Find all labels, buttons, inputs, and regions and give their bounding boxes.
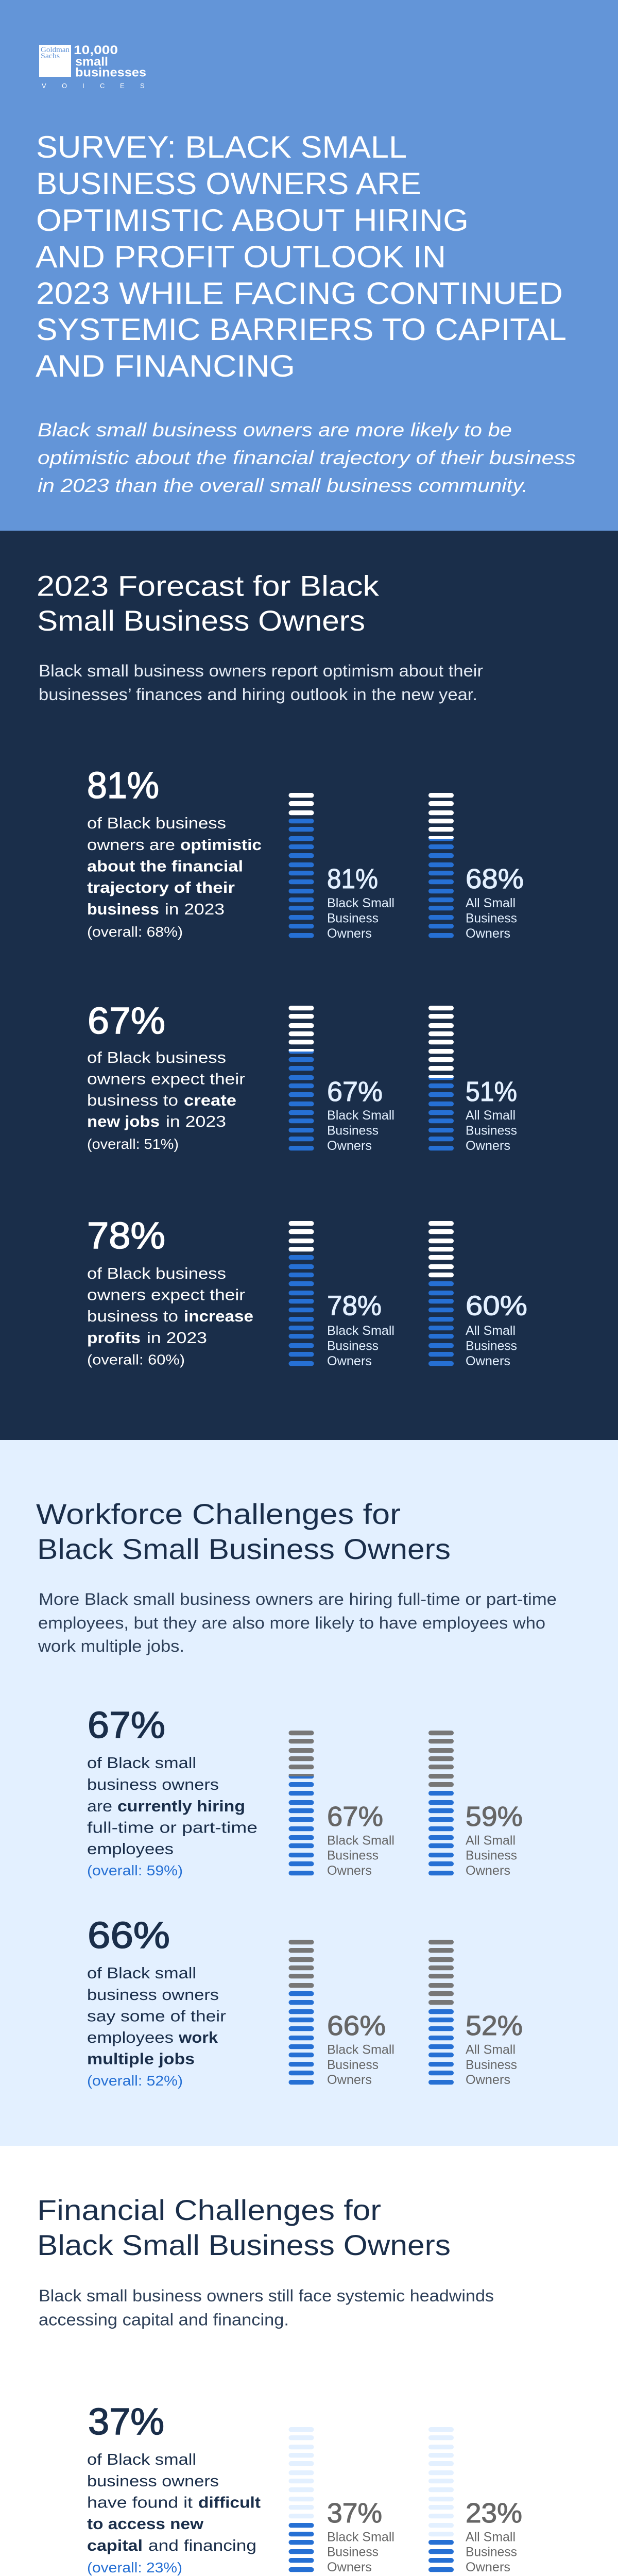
heading: workforce challenges: Black Small Business Owners: [37, 1533, 451, 1565]
stat: 67% currently hiring: are: [87, 1797, 112, 1815]
stat: 78% expect to increase profits: owners expect their: [87, 1286, 245, 1303]
heading: workforce challenges: Workforce Challenges for: [36, 1498, 401, 1530]
stat: 81% optimistic about financial trajectory: trajectory of their: [87, 878, 235, 896]
label: 51% all small business owners: All Small: [466, 1108, 516, 1123]
stat: 81% optimistic about financial trajectory: of Black business: [87, 814, 226, 832]
stat: 37% difficult to access new capital: [87, 2401, 261, 2575]
stat: 67% currently hiring: of Black small: [87, 1754, 196, 1772]
chart: 51% all small business owners: [428, 1006, 454, 1150]
label: 67% black small business owners: [327, 1076, 394, 1153]
stat: 67% expect to create new jobs: new jobs: [87, 1112, 160, 1130]
subtitle: in 2023 than the overall small business community.: [38, 475, 528, 496]
stat: 81% optimistic about financial trajectory: [87, 765, 262, 940]
stat: 66% employees work multiple jobs: multiple jobs: [87, 2049, 195, 2068]
title: SYSTEMIC BARRIERS TO CAPITAL: [36, 312, 566, 347]
label: 66% black small business owners: Owners: [327, 2073, 372, 2087]
label: 60% all small business owners: [466, 1290, 527, 1368]
stat: 67% currently hiring: currently hiring: [117, 1797, 245, 1815]
heading: 2023 forecast: [37, 570, 380, 637]
logo: Goldman Sachs 10,000 Small Businesses Voices: Goldman: [41, 46, 70, 54]
stat: 37% difficult to access new capital: to access new: [87, 2515, 204, 2533]
logo: Goldman Sachs 10,000 Small Businesses Voices: VOICES: [42, 82, 145, 90]
subtitle: [38, 419, 576, 496]
label: 67% black small business owners: Owners: [327, 1139, 372, 1153]
label: 37% black small business owners: Black Small: [327, 2530, 394, 2544]
label: 59% all small business owners: 59%: [466, 1801, 523, 1832]
label: 67% black small business owners: Black Small: [327, 1108, 394, 1123]
label: 68% all small business owners: All Small: [466, 896, 516, 910]
chart: 59% all small business owners: [428, 1731, 454, 1875]
stat: 67% currently hiring: (overall: 59%): [87, 1862, 183, 1878]
label: 60% all small business owners: 60%: [466, 1290, 527, 1321]
stat: 67% currently hiring: employees: [87, 1840, 174, 1858]
label: 52% all small business owners: [466, 2010, 523, 2087]
title: 2023 WHILE FACING CONTINUED: [36, 276, 563, 311]
label: 67% black small business owners: Black Small: [327, 1833, 394, 1848]
label: 23% all small business owners: 23%: [466, 2498, 522, 2529]
chart: 37% black small business owners: [288, 2427, 314, 2572]
label: 37% black small business owners: [327, 2498, 394, 2574]
label: 60% all small business owners: Business: [466, 1338, 517, 1353]
label: 67% black small business owners: Owners: [327, 1863, 372, 1878]
title: AND FINANCING: [36, 349, 295, 383]
heading: financial challenges: Black Small Business Owners: [37, 2229, 451, 2261]
panel: workforce challenges: [0, 1440, 618, 2146]
text block: workforce intro: work multiple jobs.: [38, 1637, 184, 1655]
text block: financial intro: Black small business owners still face systemic headwinds: [39, 2286, 494, 2305]
stat: 67% currently hiring: business owners: [87, 1775, 219, 1793]
stat: 37% difficult to access new capital: (overall: 23%): [87, 2560, 182, 2575]
label: 67% black small business owners: 67%: [327, 1076, 383, 1107]
label: 78% black small business owners: 78%: [327, 1290, 382, 1321]
logo: Goldman Sachs 10,000 Small Businesses Voices: small: [75, 55, 108, 69]
chart: 66% black small business owners: [288, 1940, 314, 2084]
label: 67% black small business owners: [327, 1801, 394, 1878]
text block: financial intro: [39, 2286, 494, 2329]
heading: financial challenges: [37, 2194, 451, 2261]
stat: 81% optimistic about financial trajectory: owners are: [87, 836, 175, 854]
stat: 81% optimistic about financial trajectory: business: [87, 900, 159, 918]
title: [36, 130, 566, 383]
title: BUSINESS OWNERS ARE: [36, 166, 421, 201]
chart: 67% black small business owners: [288, 1006, 314, 1150]
stat: 66% employees work multiple jobs: [87, 1915, 226, 2089]
stat: 81% optimistic about financial trajectory: about the financial: [87, 857, 243, 875]
text block: workforce intro: [38, 1590, 557, 1655]
label: 37% black small business owners: Owners: [327, 2560, 372, 2574]
label: 23% all small business owners: [466, 2498, 522, 2574]
label: 51% all small business owners: 51%: [466, 1076, 517, 1107]
stat: 66% employees work multiple jobs: of Black small: [87, 1964, 196, 1982]
label: 52% all small business owners: 52%: [466, 2010, 523, 2041]
stat: 67% currently hiring: [87, 1705, 258, 1878]
chart: 67% black small business owners: [288, 1731, 314, 1875]
label: 81% black small business owners: 81%: [327, 863, 378, 894]
label: 59% all small business owners: [466, 1801, 523, 1878]
logo: Goldman Sachs 10,000 Small Businesses Voices: Sachs: [41, 52, 60, 60]
stat: 67% expect to create new jobs: 67%: [88, 1001, 165, 1042]
label: 66% black small business owners: Black Small: [327, 2042, 394, 2057]
label: 81% black small business owners: Owners: [327, 926, 372, 941]
label: 51% all small business owners: Owners: [466, 1139, 510, 1153]
label: 68% all small business owners: [466, 863, 524, 941]
label: 59% all small business owners: All Small: [466, 1833, 516, 1848]
label: 23% all small business owners: Owners: [466, 2560, 510, 2574]
stat: 78% expect to increase profits: business to: [87, 1307, 178, 1325]
stat: 67% expect to create new jobs: [87, 1001, 245, 1152]
stat: 78% expect to increase profits: (overall: 60%): [87, 1352, 185, 1367]
label: 52% all small business owners: Business: [466, 2058, 517, 2072]
text block: forecast intro: [39, 662, 483, 704]
stat: 78% expect to increase profits: 78%: [87, 1215, 165, 1257]
stat: 67% expect to create new jobs: of Black business: [87, 1048, 226, 1066]
label: 81% black small business owners: Business: [327, 911, 379, 925]
chart: 23% all small business owners: [428, 2427, 454, 2572]
stat: 81% optimistic about financial trajectory: 81%: [87, 765, 159, 806]
panel: 2023 forecast: [0, 531, 618, 1440]
stat: 67% expect to create new jobs: in 2023: [166, 1112, 226, 1130]
label: 23% all small business owners: Business: [466, 2545, 517, 2560]
stat: 37% difficult to access new capital: of Black small: [87, 2450, 196, 2468]
heading: workforce challenges: [36, 1498, 451, 1565]
title: OPTIMISTIC ABOUT HIRING: [36, 203, 469, 238]
stat: 66% employees work multiple jobs: business owners: [87, 1986, 219, 2004]
heading: 2023 forecast: Small Business Owners: [37, 604, 365, 637]
text block: forecast intro: Black small business owners report optimism about their: [39, 662, 483, 680]
text block: workforce intro: More Black small business owners are hiring full-time or part-time: [39, 1590, 557, 1608]
label: 66% black small business owners: 66%: [327, 2010, 386, 2041]
label: 78% black small business owners: Black Small: [327, 1324, 394, 1338]
logo: Goldman Sachs 10,000 Small Businesses Voices: businesses: [75, 66, 146, 79]
label: 59% all small business owners: Owners: [466, 1863, 510, 1878]
label: 68% all small business owners: Business: [466, 911, 517, 925]
label: 67% black small business owners: Business: [327, 1123, 379, 1138]
chart: 81% black small business owners: [288, 793, 314, 938]
label: 67% black small business owners: Business: [327, 1849, 379, 1863]
chart: 52% all small business owners: [428, 1940, 454, 2084]
label: 52% all small business owners: All Small: [466, 2042, 516, 2057]
stat: 78% expect to increase profits: profits: [87, 1329, 141, 1347]
label: 78% black small business owners: Owners: [327, 1354, 372, 1368]
stat: 67% currently hiring: 67%: [88, 1705, 165, 1746]
stat: 37% difficult to access new capital: 37%: [88, 2401, 164, 2443]
label: 68% all small business owners: Owners: [466, 926, 510, 941]
label: 78% black small business owners: Business: [327, 1338, 379, 1353]
stat: 78% expect to increase profits: in 2023: [147, 1329, 207, 1347]
stat: 37% difficult to access new capital: have found it: [87, 2494, 193, 2511]
stat: 37% difficult to access new capital: business owners: [87, 2472, 219, 2490]
label: 81% black small business owners: [327, 863, 394, 941]
chart: 68% all small business owners: [428, 793, 454, 938]
stat: 66% employees work multiple jobs: say some of their: [87, 2007, 226, 2025]
stat: 67% expect to create new jobs: business to: [87, 1091, 178, 1109]
label: 51% all small business owners: Business: [466, 1123, 517, 1138]
stat: 67% expect to create new jobs: (overall: 51%): [87, 1136, 179, 1152]
heading: 2023 forecast: 2023 Forecast for Black: [37, 570, 380, 602]
stat: 81% optimistic about financial trajectory: in 2023: [165, 900, 225, 918]
label: 66% black small business owners: [327, 2010, 394, 2087]
logo: Goldman Sachs 10,000 Small Businesses Voices: [39, 43, 146, 90]
stat: 66% employees work multiple jobs: 66%: [88, 1915, 170, 1956]
stat: 66% employees work multiple jobs: employees: [87, 2028, 174, 2046]
stat: 37% difficult to access new capital: difficult: [198, 2494, 261, 2511]
label: 60% all small business owners: Owners: [466, 1354, 510, 1368]
text block: workforce intro: employees, but they are also more likely to have employees who: [38, 1614, 545, 1632]
stat: 66% employees work multiple jobs: work: [178, 2028, 218, 2046]
logo: Goldman Sachs 10,000 Small Businesses Voices: 10,000: [74, 43, 118, 57]
stat: 81% optimistic about financial trajectory: optimistic: [180, 836, 262, 854]
title: AND PROFIT OUTLOOK IN: [36, 240, 446, 274]
subtitle: Black small business owners are more likely to be: [38, 419, 512, 440]
label: 59% all small business owners: Business: [466, 1849, 517, 1863]
stat: 67% currently hiring: full-time or part-time: [87, 1819, 258, 1836]
subtitle: optimistic about the financial trajectory of their business: [38, 447, 576, 468]
label: 66% black small business owners: Business: [327, 2058, 379, 2072]
panel: hero header: [0, 0, 618, 531]
label: 23% all small business owners: All Small: [466, 2530, 516, 2544]
stat: 78% expect to increase profits: of Black business: [87, 1264, 226, 1282]
text block: forecast intro: businesses’ finances and hiring outlook in the new year.: [39, 685, 477, 704]
label: 37% black small business owners: Business: [327, 2545, 379, 2560]
label: 67% black small business owners: 67%: [327, 1801, 383, 1832]
text block: financial intro: accessing capital and financing.: [39, 2310, 289, 2329]
stat: 81% optimistic about financial trajectory: (overall: 68%): [87, 924, 183, 940]
label: 78% black small business owners: [327, 1290, 394, 1368]
stat: 37% difficult to access new capital: and financing: [148, 2536, 256, 2554]
label: 37% black small business owners: 37%: [327, 2498, 382, 2529]
title: SURVEY: BLACK SMALL: [36, 130, 407, 164]
stat: 67% expect to create new jobs: create: [184, 1091, 236, 1109]
panel: financial challenges: [0, 2146, 618, 2576]
label: 52% all small business owners: Owners: [466, 2073, 510, 2087]
stat: 78% expect to increase profits: increase: [184, 1307, 253, 1325]
label: 51% all small business owners: [466, 1076, 517, 1153]
stat: 37% difficult to access new capital: capital: [87, 2536, 143, 2554]
heading: financial challenges: Financial Challenges for: [37, 2194, 381, 2226]
chart: 60% all small business owners: [428, 1221, 454, 1366]
label: 68% all small business owners: 68%: [466, 863, 524, 894]
stat: 66% employees work multiple jobs: (overall: 52%): [87, 2073, 183, 2089]
stat: 78% expect to increase profits: [87, 1215, 253, 1367]
stat: 67% expect to create new jobs: owners expect their: [87, 1070, 245, 1088]
label: 60% all small business owners: All Small: [466, 1324, 516, 1338]
label: 81% black small business owners: Black Small: [327, 896, 394, 910]
chart: 78% black small business owners: [288, 1221, 314, 1366]
